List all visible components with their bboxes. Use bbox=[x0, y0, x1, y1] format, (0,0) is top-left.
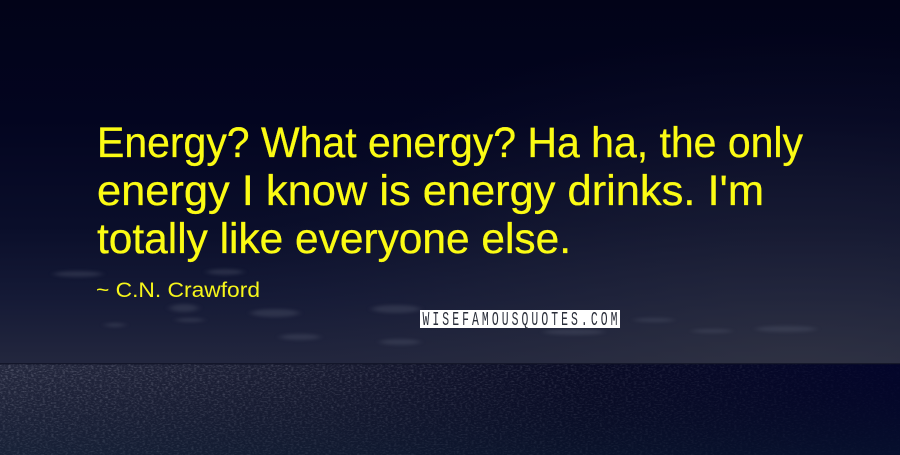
background: clouds bbox=[54, 269, 816, 345]
quote text: energy I know is energy drinks. I'm bbox=[97, 167, 764, 215]
quote text: Energy? What energy? Ha ha, the only bbox=[97, 119, 803, 167]
author attribution: ~ C.N. Crawford bbox=[96, 279, 260, 302]
background: night sky bbox=[0, 0, 900, 364]
quote text bbox=[97, 119, 803, 263]
background: sea bbox=[0, 363, 900, 455]
watermark: WISEFAMOUSQUOTES.COM bbox=[422, 309, 618, 331]
quote text: totally like everyone else. bbox=[97, 215, 571, 263]
